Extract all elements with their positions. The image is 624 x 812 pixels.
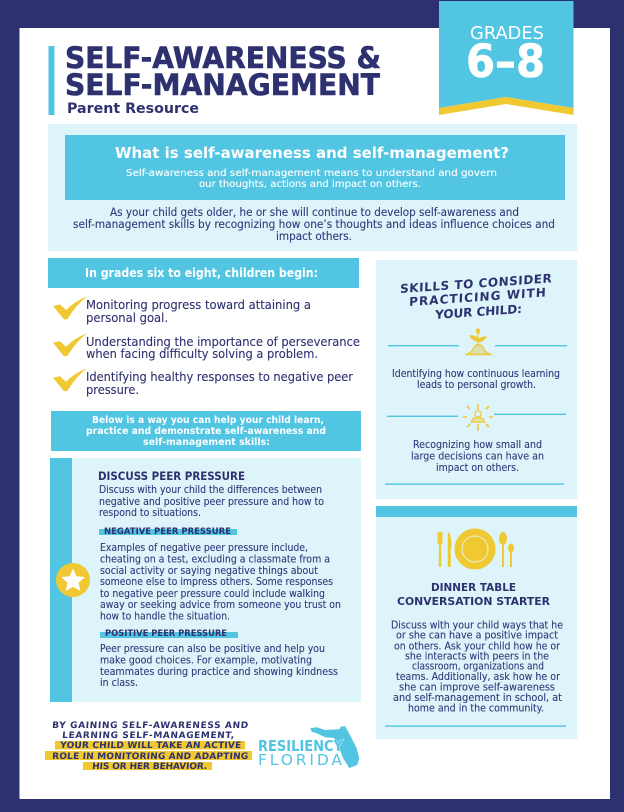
grades ribbon: GRADES: [470, 23, 544, 44]
text: skill 2: Recognizing how small and: [413, 438, 542, 451]
text: negative examples: someone else to impress others. Some responses: [100, 575, 333, 588]
grades ribbon: 6–8: [466, 35, 545, 88]
text: skill 1: [392, 367, 560, 391]
closing statement: [45, 721, 252, 772]
heading: skills to consider: YOUR CHILD:: [434, 302, 523, 322]
text: positive examples: make good choices. For example, motivating: [100, 654, 312, 666]
heading: dinner table: CONVERSATION STARTER: [397, 595, 551, 608]
closing statement: HIS OR HER BEHAVIOR.: [92, 762, 207, 772]
text: dinner prompt: she can improve self-awareness: [399, 680, 555, 693]
panel: what is self-awareness: impact others.: [276, 229, 352, 243]
panel: what is self-awareness: What is self-awareness and self-management?: [115, 144, 509, 162]
text: negative examples: away or seeking advice from someone you trust on: [100, 598, 341, 611]
checklist: [53, 296, 360, 397]
text: intro: [99, 483, 324, 519]
callout: below is a way: self-management skills:: [143, 437, 270, 448]
text: skill 2: large decisions can have an: [411, 450, 544, 462]
panel: what is self-awareness: self-management skills by recognizing how one’s thoughts and ideas influence choices and: [73, 217, 555, 231]
text: skill 2: impact on others.: [436, 461, 519, 474]
header: title block: SELF-MANAGEMENT: [65, 68, 380, 102]
check item 2: Understanding the importance of perseverance: [86, 334, 360, 349]
closing statement: YOUR CHILD WILL TAKE AN ACTIVE: [59, 741, 241, 751]
heading: dinner table: [397, 581, 551, 608]
check item 3: Identifying healthy responses to negative peer: [86, 369, 354, 384]
text: positive examples: in class.: [100, 676, 138, 689]
text: negative examples: [100, 541, 341, 622]
panel: what is self-awareness: our thoughts, actions and impact on others.: [199, 179, 421, 190]
panel: dinner table conversation starter: [376, 506, 577, 739]
text: dinner prompt: and self-management in school, at: [393, 691, 562, 704]
text: dinner prompt: home and in the community.: [408, 701, 544, 714]
heading: in grades six to eight: In grades six to eight, children begin:: [85, 265, 318, 280]
text: skill 1: Identifying how continuous learning: [392, 367, 560, 380]
text: negative examples: to negative peer pressure could include walking: [100, 587, 325, 600]
check item 1: Monitoring progress toward attaining a: [86, 297, 311, 312]
text: positive examples: teammates during practice and showing kindness: [100, 665, 338, 678]
logo: resiliency florida: FLORIDA: [258, 751, 342, 769]
text: negative examples: how to handle the situation.: [100, 610, 230, 622]
text: dinner prompt: classroom, organizations and: [412, 660, 544, 673]
text: positive examples: [100, 642, 338, 689]
panel: what is self-awareness: Self-awareness and self-management means to understand and govern: [126, 168, 497, 179]
icon: place setting: [437, 528, 514, 570]
text: dinner prompt: she interacts with peers in the: [405, 650, 549, 662]
heading: skills to consider: SKILLS TO CONSIDER: [400, 271, 553, 296]
panel: skills to consider: [376, 260, 577, 499]
text: dinner prompt: on others. Ask your child how he or: [394, 639, 560, 652]
subheading: negative peer pressure: NEGATIVE PEER PRESSURE: [104, 526, 231, 537]
closing statement: LEARNING SELF-MANAGEMENT,: [62, 731, 234, 741]
text: negative examples: social activity or saying negative things about: [100, 564, 318, 577]
text: dinner prompt: Discuss with your child ways that he: [391, 618, 563, 631]
check item 3: pressure.: [86, 382, 139, 397]
text: intro: respond to situations.: [99, 506, 201, 519]
panel: discuss peer pressure: [50, 458, 361, 702]
icon: sprout: [465, 328, 492, 355]
heading: dinner table: DINNER TABLE: [431, 581, 516, 594]
logo: resiliency florida: RESILIENCY: [258, 737, 344, 755]
text: dinner prompt: teams. Additionally, ask how he or: [396, 670, 560, 683]
heading: skills to consider: PRACTICING WITH: [409, 285, 547, 309]
heading: in grades six to eight: [48, 258, 359, 288]
icon: person with arrows: [463, 404, 493, 431]
header: title block: SELF-AWARENESS &: [65, 41, 381, 75]
closing statement: ROLE IN MONITORING AND ADAPTING: [52, 752, 248, 762]
heading: discuss peer pressure: DISCUSS PEER PRESSURE: [98, 469, 245, 483]
text: dinner prompt: or she can have a positive impact: [396, 629, 558, 642]
check item 1: [53, 296, 311, 325]
text: intro: Discuss with your child the differences between: [99, 483, 322, 496]
icon: star badge: [56, 563, 90, 597]
check item 3: [53, 368, 354, 397]
closing statement: BY GAINING SELF-AWARENESS AND: [52, 721, 248, 731]
text: positive examples: Peer pressure can also be positive and help you: [100, 642, 325, 655]
heading: skills to consider: [400, 271, 553, 322]
text: skill 2: [411, 438, 544, 474]
header: title block: [48, 41, 381, 117]
check item 2: when facing difficulty solving a problem.: [86, 346, 318, 361]
text: negative examples: cheating on a test, excluding a classmate from a: [100, 552, 330, 566]
callout: below is a way: practice and demonstrate self-awareness and: [86, 426, 326, 437]
check item 1: personal goal.: [86, 310, 168, 325]
logo: resiliency florida: [258, 726, 359, 769]
callout: below is a way: [51, 411, 361, 451]
text: skill 1: leads to personal growth.: [417, 378, 536, 391]
check item 2: [53, 333, 360, 361]
grades ribbon: [439, 1, 574, 115]
header: title block: Parent Resource: [67, 101, 199, 117]
text: intro: negative and positive peer pressure and how to: [99, 495, 324, 508]
callout: below is a way: Below is a way you can help your child learn,: [92, 415, 324, 426]
subheading: positive peer pressure: POSITIVE PEER PRESSURE: [105, 628, 227, 639]
panel: what is self-awareness: As your child gets older, he or she will continue to develop self-awareness and: [110, 205, 519, 219]
text: negative examples: Examples of negative peer pressure include,: [100, 541, 308, 554]
panel: what is self-awareness: [48, 124, 577, 251]
text: dinner prompt: [391, 618, 563, 714]
